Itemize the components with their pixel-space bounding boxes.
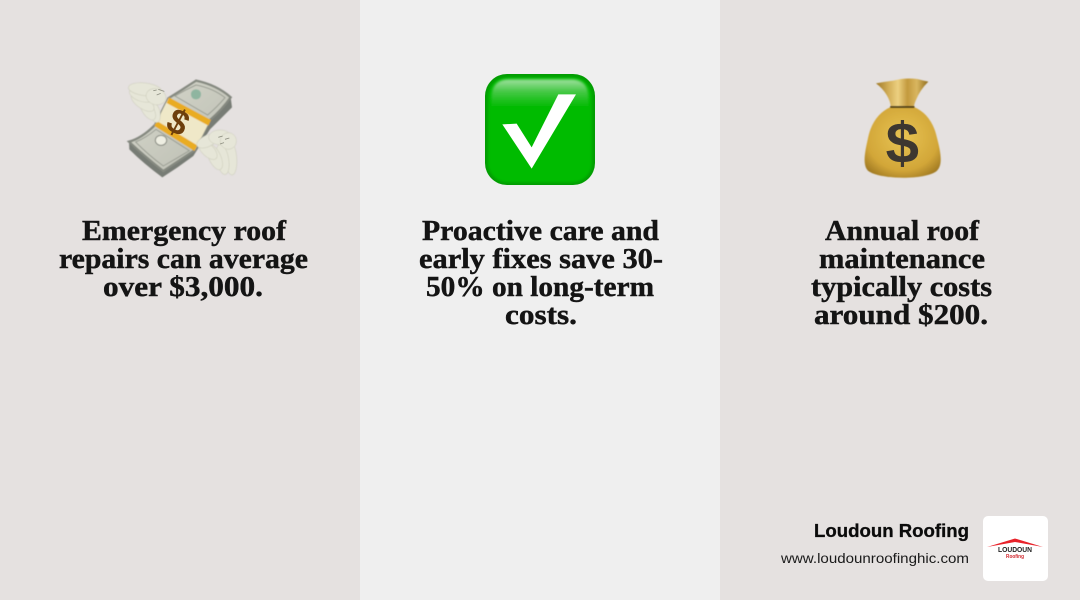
heading: proactive care: 50% on long-term — [426, 271, 654, 303]
icon: money with wings: $ — [160, 101, 196, 144]
heading: annual maintenance: maintenance — [819, 243, 985, 275]
icon: green check mark — [485, 74, 595, 185]
heading: emergency repairs — [59, 215, 308, 303]
heading: proactive care: costs. — [505, 299, 577, 331]
company name and website: www.loudounroofinghic.com — [780, 550, 969, 566]
heading: proactive care: Proactive care and — [422, 215, 659, 247]
icon: money bag — [864, 78, 942, 179]
icon: money bag: $ — [886, 112, 919, 176]
heading: emergency repairs: repairs can average — [59, 243, 308, 275]
heading: annual maintenance: around $200. — [814, 299, 988, 331]
heading: annual maintenance — [811, 215, 992, 331]
footer: company brand — [780, 516, 1048, 581]
logo: Loudoun Roofing: Roofing — [1006, 554, 1024, 560]
logo: Loudoun Roofing — [983, 516, 1048, 581]
heading: emergency repairs: over $3,000. — [103, 271, 263, 303]
heading: emergency repairs: Emergency roof — [82, 215, 286, 247]
panel: annual maintenance — [720, 0, 1080, 600]
heading: annual maintenance: typically costs — [811, 271, 992, 303]
panel: emergency repairs — [0, 0, 360, 600]
company name and website: Loudoun Roofing — [814, 520, 969, 541]
icon: money with wings — [126, 79, 238, 178]
heading: proactive care — [419, 215, 663, 331]
panel: proactive care — [360, 0, 720, 600]
company name and website — [780, 520, 969, 566]
heading: annual maintenance: Annual roof — [825, 215, 979, 247]
logo: Loudoun Roofing: LOUDOUN — [998, 547, 1032, 554]
heading: proactive care: early fixes save 30- — [419, 243, 663, 275]
